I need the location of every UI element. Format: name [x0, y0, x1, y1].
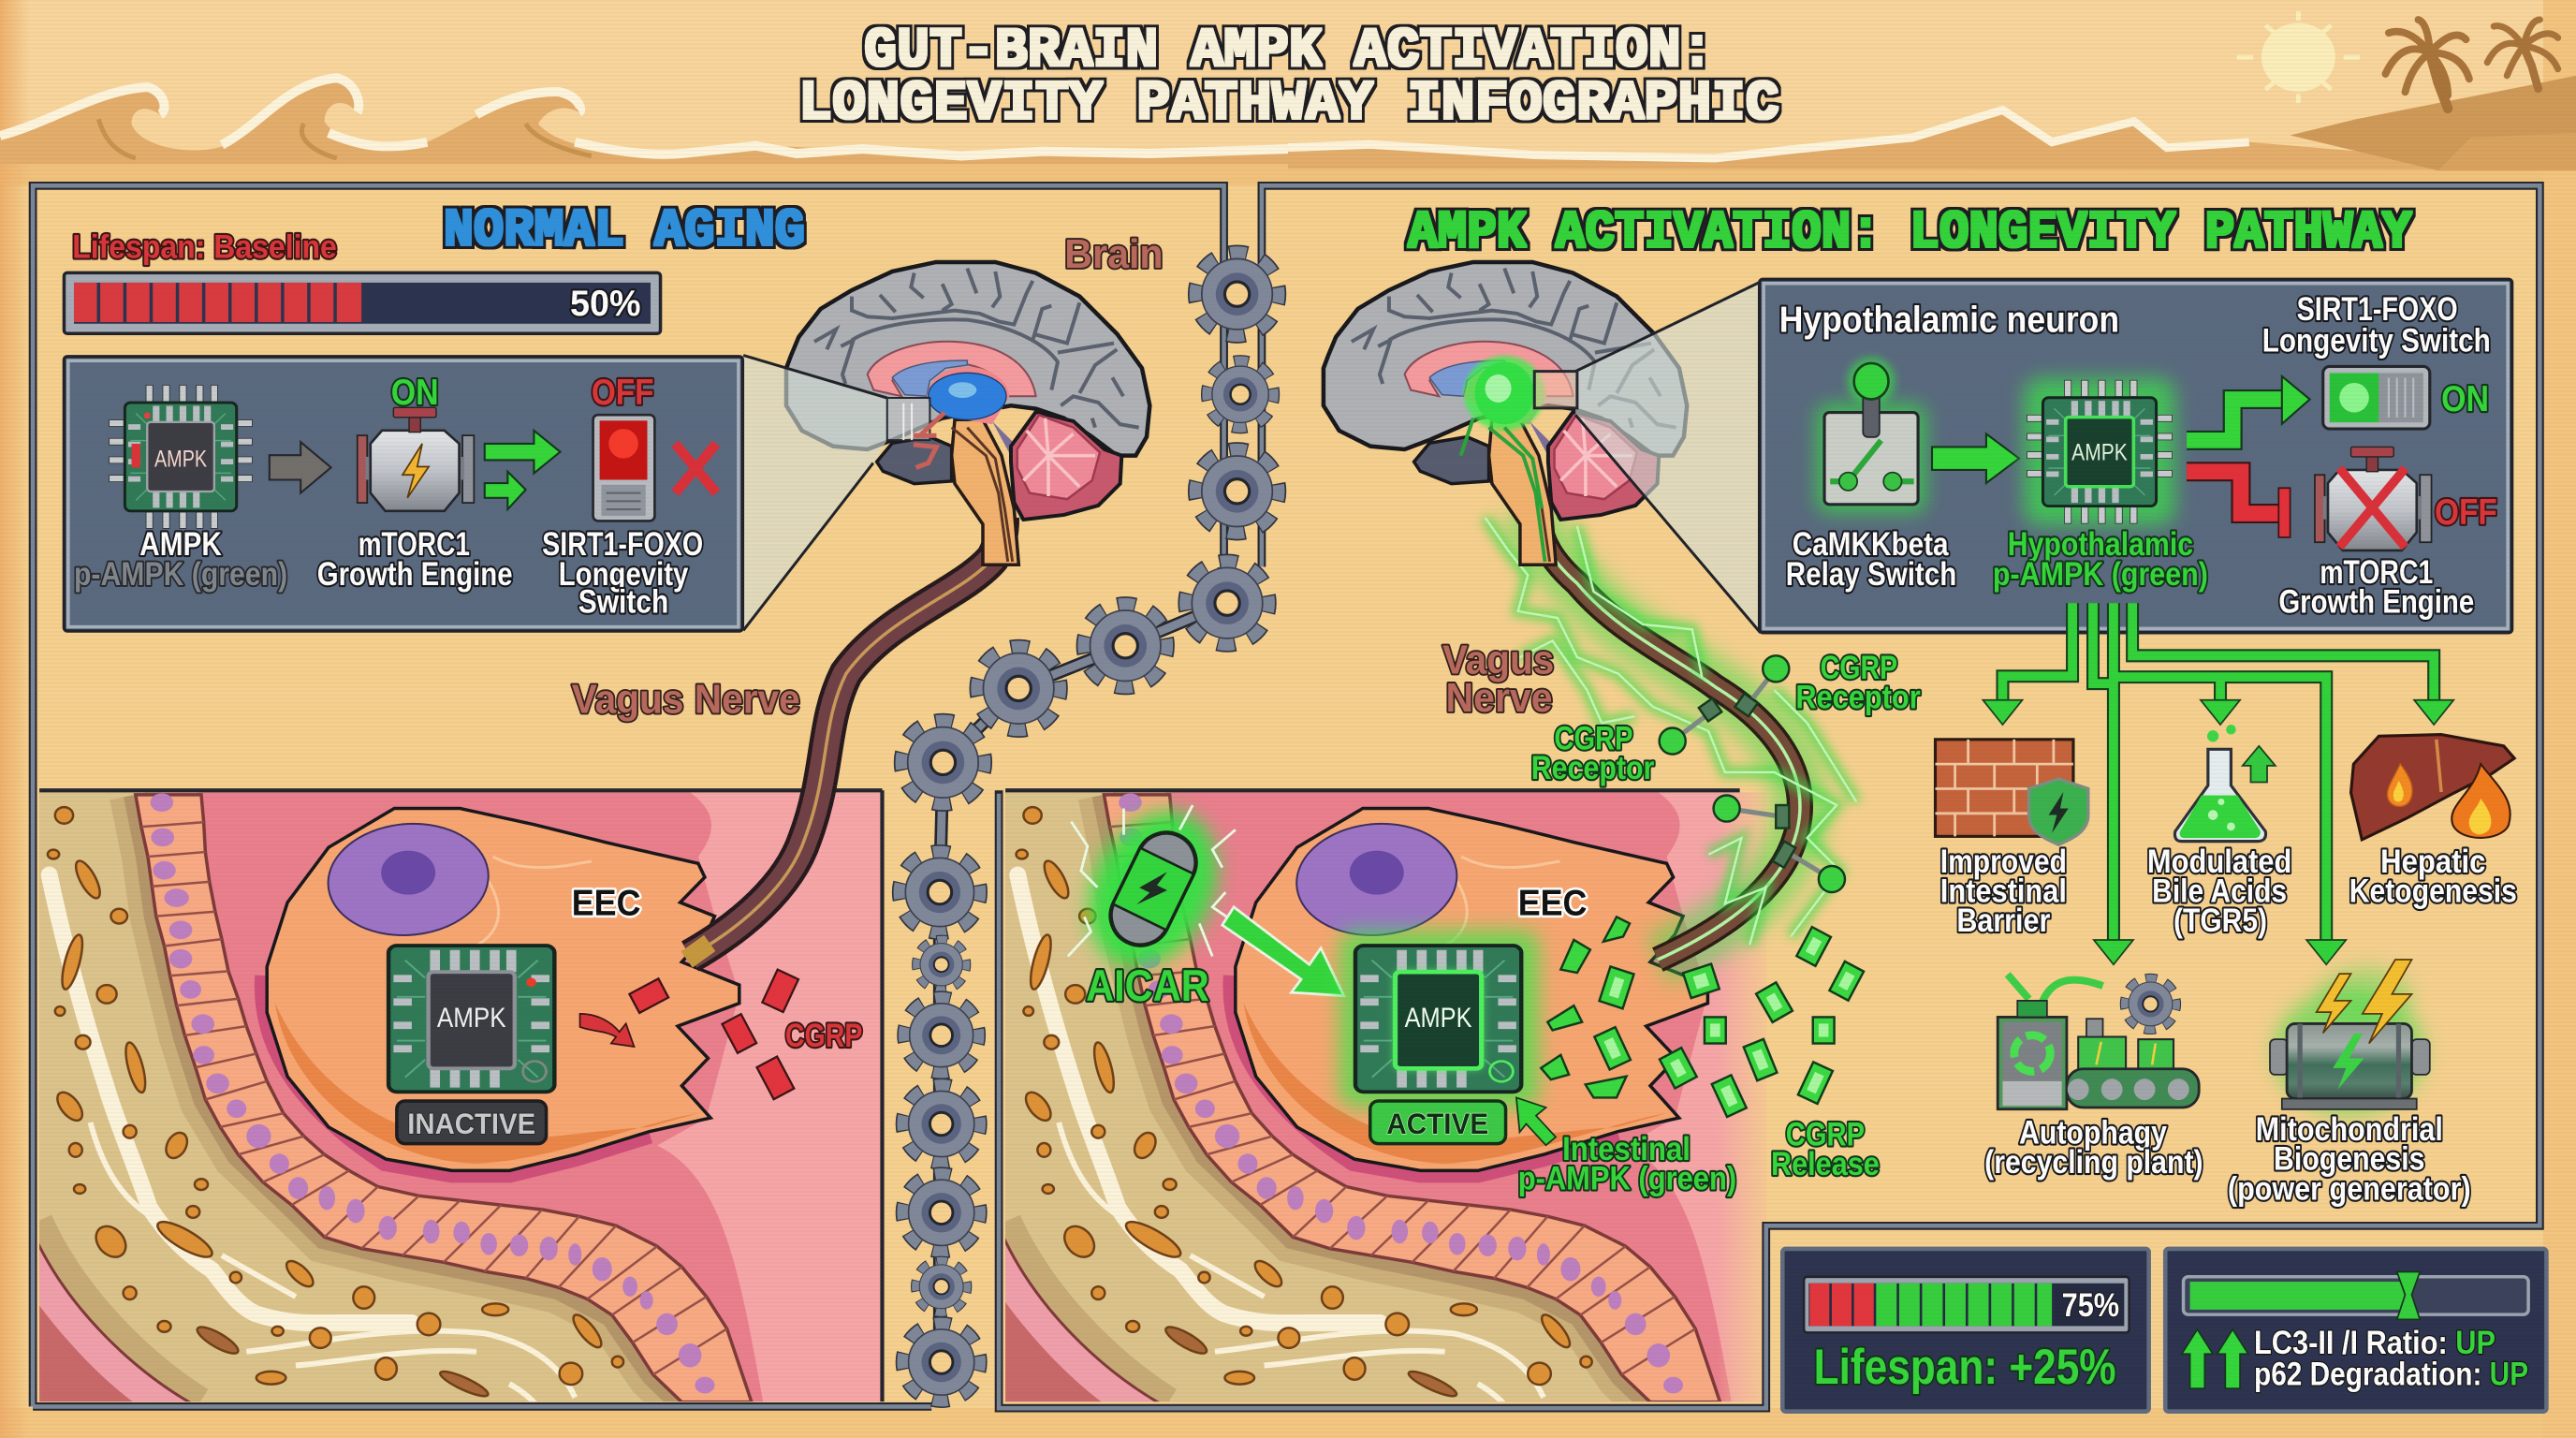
panel: lifespan meter +25%: Lifespan: +25%: [1814, 1340, 2116, 1395]
labels: upper outcomes: Ketogenesis: [2349, 873, 2517, 910]
sun: [2237, 11, 2360, 103]
inset labels: p-AMPK (green): [1993, 556, 2208, 593]
title: GUT-BRAIN AMPK ACTIVATION:: [864, 19, 1714, 82]
arrows: green: [485, 431, 560, 509]
arrow: intestinal p-AMPK pointer: [1516, 1097, 1556, 1145]
panel: hypothalamic neuron inset: [1760, 279, 2512, 633]
CGRP receptor label: lower: CGRP: [1554, 720, 1633, 756]
labels: lower outcomes: [1984, 1111, 2471, 1207]
inset labels: SIRT1-FOXO: [2297, 291, 2458, 328]
panel: autophagy markers: [2165, 1249, 2546, 1412]
lifespan bar: baseline: [64, 229, 661, 333]
arrow: grey: [270, 442, 331, 493]
arrows: up: [2182, 1329, 2248, 1388]
CGRP packets: normal aging: CGRP: [785, 1018, 862, 1054]
panel: lifespan meter +25%: 75%: [2062, 1287, 2119, 1324]
labels: lower outcomes: Biogenesis: [2274, 1141, 2425, 1178]
labels: upper outcomes: Hepatic: [2380, 844, 2485, 880]
inset labels: Longevity Switch: [2262, 323, 2491, 360]
labels: upper outcomes: (TGR5): [2174, 902, 2267, 939]
chip: active AMPK in gut cell: [1339, 930, 1540, 1108]
heading: normal aging: NORMAL AGING: [444, 201, 805, 261]
labels: upper outcomes: Barrier: [1956, 902, 2051, 939]
AICAR label: AICAR: [1086, 961, 1209, 1011]
inset labels: Longevity: [559, 556, 689, 593]
chip: inactive AMPK in gut cell: AMPK: [437, 1003, 506, 1034]
labels: upper outcomes: Improved: [1940, 844, 2067, 880]
icon: modulated bile acids: [2174, 725, 2276, 842]
labels: lower outcomes: (recycling plant): [1984, 1144, 2203, 1181]
inset labels: Growth Engine: [2278, 584, 2474, 621]
heading: AMPK activation: AMPK ACTIVATION: LONGEVITY PATHWAY: [1408, 202, 2412, 262]
labels: upper outcomes: Bile Acids: [2152, 873, 2287, 910]
inset labels: SIRT1-FOXO: [542, 526, 703, 563]
EEC label: normal aging: EEC: [572, 884, 640, 924]
palm trees: [2385, 20, 2558, 109]
labels: lower outcomes: Mitochondrial: [2256, 1111, 2443, 1148]
CGRP receptor label: upper: CGRP: [1821, 650, 1897, 686]
inset labels: AMPK: [139, 526, 222, 563]
vagus nerve label: activated: Vagus: [1442, 638, 1554, 683]
labels: upper outcomes: Intestinal: [1940, 873, 2067, 910]
panel: gut image, AMPK activation: [1005, 792, 1766, 1402]
icon: CaMKKbeta relay switch: [1817, 359, 1925, 513]
icon: SIRT1-FOXO on switch: [2323, 366, 2430, 429]
labels: lower outcomes: (power generator): [2228, 1170, 2471, 1207]
inset labels: ON: [2441, 379, 2489, 419]
zoom callout: activated: [1534, 282, 1761, 633]
gear chain: [900, 253, 1278, 1401]
inset labels: CaMKKbeta: [1793, 526, 1949, 563]
branching pathway arrows: [1983, 603, 2453, 964]
dunes: [1288, 76, 2576, 170]
vagus nerve: normal aging: [687, 518, 1003, 960]
vagus nerve: activated with lightning: [1486, 509, 1856, 960]
brain label: Brain: [1064, 231, 1164, 277]
waves: [0, 78, 1288, 164]
CGRP receptor label: upper: Receptor: [1795, 679, 1921, 715]
brain: normal aging: [786, 262, 1149, 565]
CGRP receptor label: lower: [1531, 720, 1655, 786]
icon: autophagy recycling plant: [1998, 975, 2199, 1109]
CGRP receptors: [1660, 655, 1845, 892]
panel: lifespan meter +25%: [1782, 1249, 2149, 1412]
inset labels: Relay Switch: [1786, 556, 1956, 593]
OFF label: OFF: [592, 373, 654, 413]
labels: upper outcomes: [1940, 844, 2517, 939]
label: CGRP release: [1771, 1116, 1880, 1182]
labels: lower outcomes: Autophagy: [2019, 1115, 2167, 1152]
arrow: inhibits mTORC1: [2187, 472, 2291, 537]
icon: mitochondrial generator: [2270, 960, 2430, 1114]
zoom callout: normal aging: [743, 356, 944, 630]
inset labels: [1786, 291, 2497, 621]
badge: active: ACTIVE: [1386, 1107, 1488, 1140]
label: intestinal p-AMPK: Intestinal: [1562, 1131, 1690, 1167]
icon: red X: [675, 444, 716, 493]
chip: inactive AMPK: [110, 385, 252, 528]
icon: improved intestinal barrier: [1936, 740, 2088, 844]
label: CGRP release: Release: [1771, 1146, 1880, 1182]
label: intestinal p-AMPK: p-AMPK (green): [1518, 1161, 1736, 1197]
marker text: LC3-II /I Ratio: UP: [2254, 1325, 2496, 1361]
arrow: relay to chip: [1932, 433, 2019, 483]
label: CGRP release: CGRP: [1786, 1116, 1865, 1152]
inset labels: mTORC1: [359, 526, 470, 563]
brain: activated: [1324, 262, 1687, 565]
inset labels: mTORC1: [2320, 554, 2433, 591]
inset labels: Switch: [578, 584, 668, 621]
inset labels: p-AMPK (green): [74, 556, 287, 593]
inset labels: Hypothalamic: [2008, 526, 2193, 563]
marker text: p62 Degradation: UP: [2254, 1357, 2528, 1393]
label: intestinal p-AMPK: [1518, 1131, 1736, 1197]
panel: gut image, normal aging: [0, 792, 903, 1407]
chip: hypothalamic p-AMPK: AMPK: [2071, 440, 2128, 465]
inset labels: OFF: [2435, 492, 2497, 533]
label: hypothalamic neuron: Hypothalamic neuron: [1779, 301, 2119, 341]
lifespan bar: baseline: Lifespan: Baseline: [72, 229, 337, 266]
marker text: [2254, 1325, 2528, 1393]
vagus nerve label: normal aging: Vagus Nerve: [572, 677, 800, 723]
vagus nerve label: activated: [1442, 638, 1554, 721]
chip: inactive AMPK in gut cell: [388, 946, 554, 1092]
arrow: AICAR to chip: [1222, 907, 1344, 996]
badge: inactive: INACTIVE: [407, 1107, 535, 1140]
ON label: ON: [391, 373, 439, 413]
chip: active AMPK in gut cell: AMPK: [1405, 1003, 1472, 1034]
arrow: activates SIRT1-FOXO: [2187, 376, 2310, 440]
title: [798, 19, 1779, 135]
panel: normal aging signalling inset: [64, 357, 742, 631]
chip: hypothalamic p-AMPK: [2024, 378, 2175, 526]
labels: upper outcomes: Modulated: [2147, 844, 2291, 880]
icon: AICAR capsule: [1064, 789, 1244, 989]
EEC label: activated: EEC: [1518, 884, 1587, 924]
CGRP receptor label: upper: [1795, 650, 1921, 715]
chip label: AMPK: [154, 447, 208, 472]
icon: off switch: [593, 415, 654, 521]
badge: active: [1370, 1101, 1506, 1144]
inset labels: [74, 526, 703, 621]
icon: mTORC1 engine off: [2315, 447, 2432, 550]
vagus nerve label: activated: Nerve: [1445, 675, 1553, 721]
inset labels: Growth Engine: [317, 556, 513, 593]
CGRP receptor label: lower: Receptor: [1531, 750, 1655, 786]
title: LONGEVITY PATHWAY INFOGRAPHIC: [798, 71, 1779, 135]
CGRP packets: activated release: [1541, 917, 1864, 1117]
CGRP packets: normal aging: [580, 970, 862, 1099]
icon: hepatic ketogenesis: [2351, 735, 2514, 840]
lifespan bar: baseline: 50%: [570, 284, 640, 324]
header beach scene: [0, 11, 2576, 170]
icon: growth engine: [358, 407, 474, 511]
